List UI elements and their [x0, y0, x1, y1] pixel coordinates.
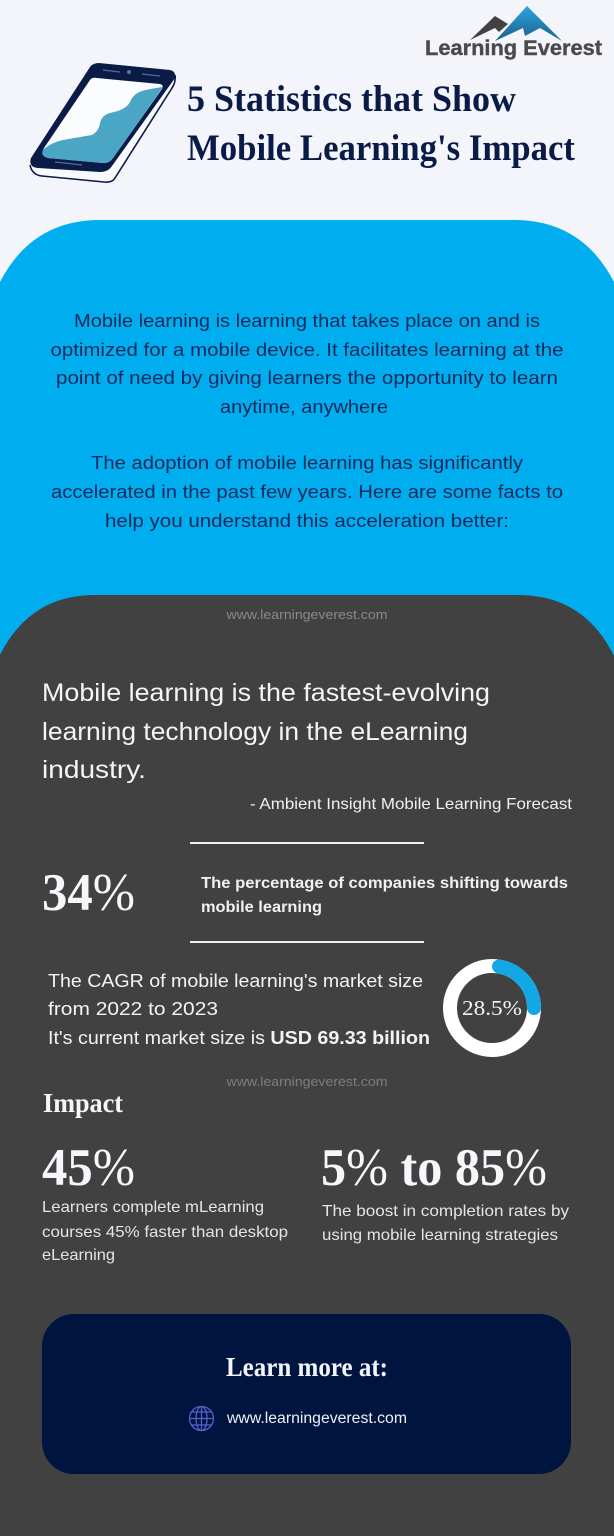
donut chart: 28.5%: 28.5%: [462, 996, 522, 1020]
logo: Learning Everest: [425, 6, 602, 60]
stat: 34%: 34%: [42, 864, 135, 922]
intro text: The adoption of mobile learning has significantly: [91, 452, 524, 473]
stat: 5% to 85%: 5% to 85%: [321, 1139, 547, 1197]
quote source: - Ambient Insight Mobile Learning Forecast: [250, 796, 573, 813]
stat: 45%: [42, 1139, 288, 1264]
stat: 34%: mobile learning: [201, 899, 322, 916]
watermark url: www.learningeverest.com: [225, 607, 388, 622]
quote: [42, 679, 490, 784]
stat: 5% to 85%: [321, 1139, 569, 1244]
intro text: accelerated in the past few years. Here are some facts to: [51, 481, 563, 502]
icon: mobile phone: [30, 63, 175, 182]
watermark url: www.learningeverest.com: [225, 1074, 388, 1089]
quote: industry.: [42, 756, 146, 784]
donut chart: 28.5%: [450, 966, 534, 1050]
stat: 34%: The percentage of companies shifting towards: [201, 875, 568, 892]
title: [187, 79, 576, 169]
panel: dark statistics: [0, 595, 614, 1536]
stat: 45%: Learners complete mLearning: [42, 1199, 264, 1216]
intro text: anytime, anywhere: [220, 396, 388, 417]
logo: Learning Everest: Learning Everest: [425, 37, 602, 60]
heading: learn more: Learn more at:: [226, 1352, 388, 1382]
CAGR text: The CAGR of mobile learning's market size: [48, 970, 423, 991]
CAGR text: [48, 970, 430, 1048]
CAGR text: from 2022 to 2023: [48, 998, 218, 1019]
stat: 5% to 85%: The boost in completion rates by: [322, 1203, 569, 1220]
icon: globe: [190, 1406, 214, 1430]
CAGR text: It's current market size is USD 69.33 billion: [48, 1027, 430, 1048]
stat: 34%: [42, 864, 568, 922]
stat: 5% to 85%: using mobile learning strategies: [322, 1227, 558, 1244]
quote: Mobile learning is the fastest-evolving: [42, 679, 490, 707]
stat: 45%: eLearning: [42, 1247, 115, 1264]
stat: 45%: courses 45% faster than desktop: [42, 1224, 288, 1241]
title: Mobile Learning's Impact: [187, 128, 576, 169]
intro text: [50, 310, 564, 531]
intro text: optimized for a mobile device. It facilitates learning at the: [50, 339, 564, 360]
heading: Impact: Impact: [43, 1088, 123, 1118]
title: 5 Statistics that Show: [187, 79, 516, 120]
panel: learn more: [42, 1314, 571, 1474]
intro text: Mobile learning is learning that takes place on and is: [74, 310, 540, 331]
stat: 45%: 45%: [42, 1139, 135, 1197]
panel: intro: [0, 220, 614, 700]
intro text: point of need by giving learners the opportunity to learn: [56, 367, 558, 388]
website url: www.learningeverest.com: [226, 1410, 407, 1427]
intro text: help you understand this acceleration better:: [105, 510, 509, 531]
quote: learning technology in the eLearning: [42, 718, 468, 746]
